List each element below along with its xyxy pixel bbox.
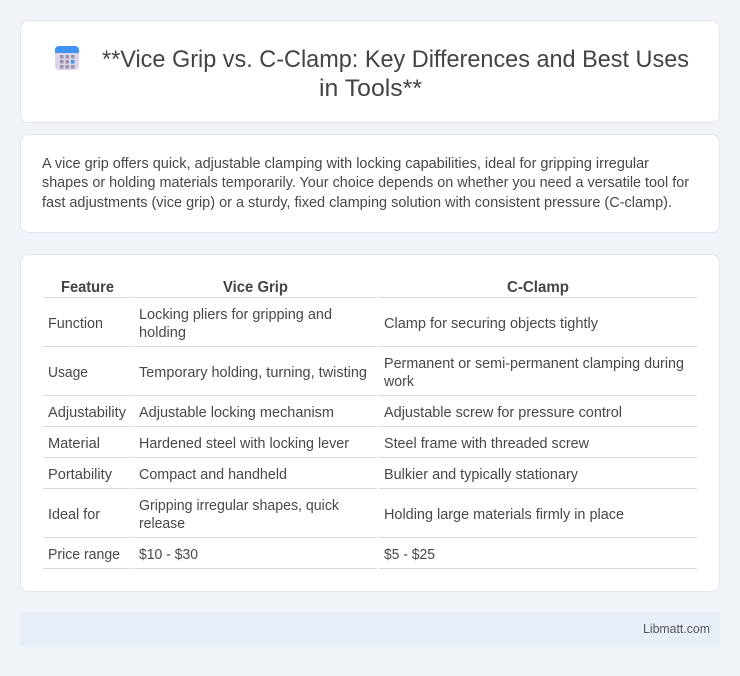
table row: ideal for: Holding large materials firmly in place [384, 507, 624, 523]
title: in Tools** [319, 75, 422, 102]
table row: material [43, 436, 697, 458]
table row: ideal for [43, 498, 697, 538]
table row: price range: $5 - $25 [384, 547, 435, 563]
table row: adjustability: Adjustability [48, 405, 127, 421]
table row: price range [43, 547, 697, 568]
footer: Libmatt.com [643, 622, 710, 636]
table row: usage: Permanent or semi-permanent clamping during [384, 356, 684, 372]
table row: adjustability [43, 405, 697, 426]
table header row: C-Clamp [507, 279, 569, 296]
table row: ideal for: Ideal for [48, 507, 100, 523]
table row: usage: Temporary holding, turning, twisting [139, 365, 367, 381]
text block: introduction [42, 156, 689, 211]
panel: comparison table [20, 254, 720, 592]
table header row: Feature [61, 279, 114, 296]
table header row: Vice Grip [223, 279, 288, 296]
footer [20, 612, 720, 646]
text block: introduction: shapes or holding materials temporarily. Your choice depends on whether you need a versatile tool for [42, 175, 689, 191]
table row: usage: work [383, 374, 415, 390]
title [102, 46, 689, 102]
table row: function: Clamp for securing objects tightly [384, 316, 599, 332]
table header row [43, 279, 697, 298]
table row: price range: $10 - $30 [139, 547, 198, 563]
table row: usage: Usage [48, 365, 88, 381]
text block: introduction: A vice grip offers quick, adjustable clamping with locking capabilities, ideal for gripping irregular [42, 156, 649, 172]
text block: introduction: fast adjustments (vice grip) or a sturdy, fixed clamping solution with consistent pressure (C-clamp). [42, 195, 672, 211]
table row: function: Function [48, 316, 103, 332]
table row: ideal for: Gripping irregular shapes, quick [139, 498, 340, 514]
table row: portability [43, 467, 697, 488]
table row: portability: Compact and handheld [139, 467, 287, 483]
table row: material: Steel frame with threaded screw [384, 436, 590, 452]
table row: price range: Price range [48, 547, 120, 563]
table row: portability: Bulkier and typically stationary [384, 467, 579, 483]
table row: function: holding [139, 325, 186, 341]
table row: material: Hardened steel with locking lever [139, 436, 349, 452]
title: **Vice Grip vs. C-Clamp: Key Differences and Best Uses [102, 46, 689, 73]
table row: ideal for: release [139, 516, 185, 532]
panel: header [20, 20, 720, 122]
table row: usage [43, 356, 697, 396]
table row: adjustability: Adjustable locking mechanism [139, 405, 334, 421]
panel: introduction [20, 134, 720, 232]
table row: adjustability: Adjustable screw for pressure control [384, 405, 622, 421]
table row: material: Material [48, 436, 100, 452]
icon: calendar [55, 46, 79, 70]
table row: function [43, 307, 697, 346]
table row: portability: Portability [48, 467, 113, 483]
table row: function: Locking pliers for gripping and [139, 307, 332, 323]
